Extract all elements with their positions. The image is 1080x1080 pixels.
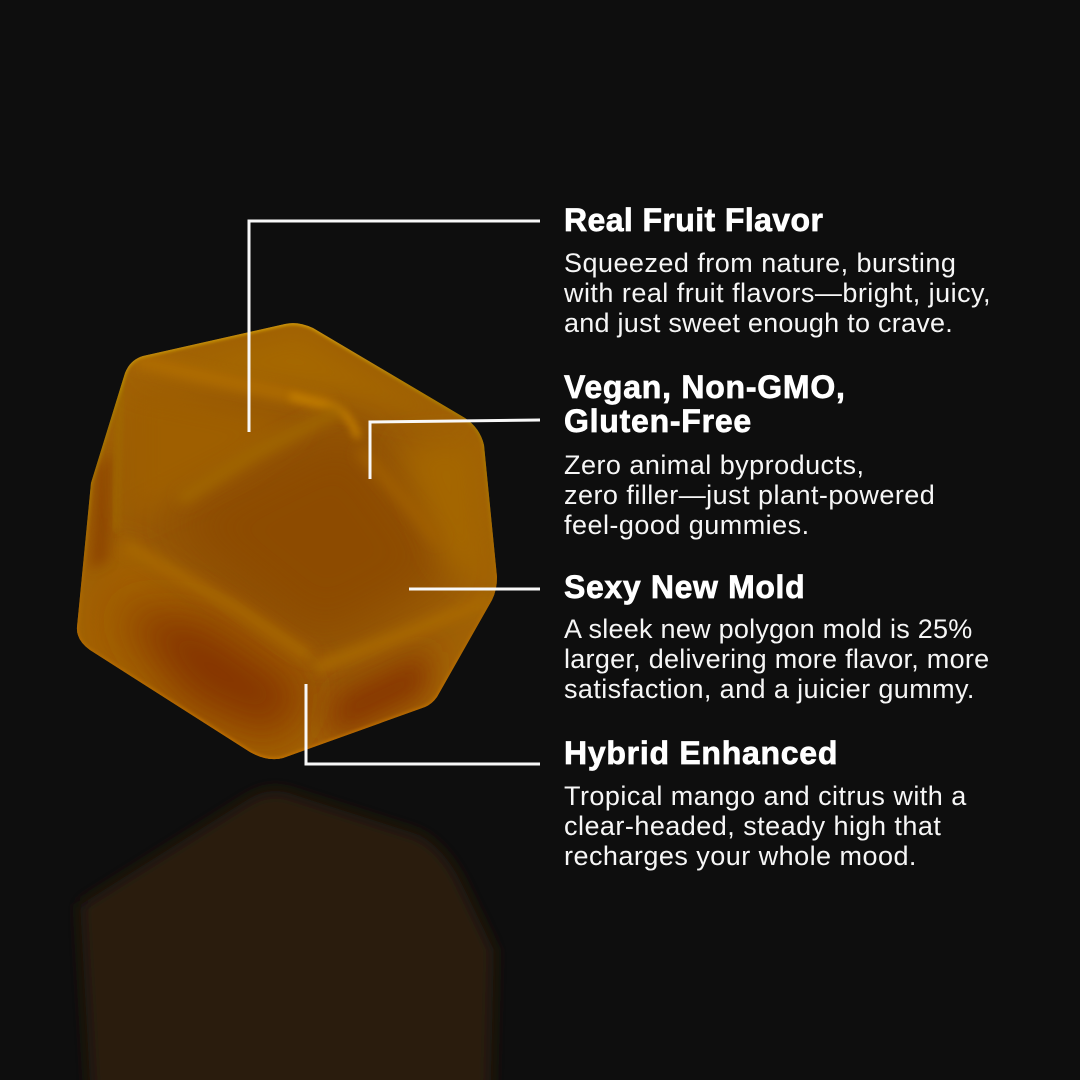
leader line: Vegan, Non-GMO, Gluten-Free	[370, 420, 540, 479]
description: Squeezed from nature, bursting	[564, 248, 956, 278]
description: Tropical mango and citrus with a	[564, 781, 967, 811]
description	[564, 248, 991, 338]
gummy body	[70, 323, 497, 770]
heading: Hybrid Enhanced	[564, 735, 838, 771]
description: Zero animal byproducts,	[564, 450, 864, 480]
description: A sleek new polygon mold is 25%	[564, 614, 972, 644]
heading	[564, 369, 846, 439]
description	[564, 450, 935, 540]
feature: Sexy New Mold	[564, 569, 989, 704]
description: clear-headed, steady high that	[564, 811, 941, 841]
bottom-left face	[77, 572, 304, 760]
description: feel-good gummies.	[564, 510, 810, 540]
facet ridges	[135, 360, 330, 404]
left dark sliver	[90, 450, 112, 570]
gummy illustration with reflection and leader lines	[76, 220, 540, 1080]
description: recharges your whole mood.	[564, 841, 917, 871]
bottom red tones	[120, 610, 310, 740]
heading: Real Fruit Flavor	[564, 202, 823, 238]
description	[564, 781, 967, 871]
description	[564, 614, 989, 704]
heading: Vegan, Non-GMO,	[564, 369, 846, 405]
rim glow	[77, 323, 497, 759]
leader line: Hybrid Enhanced	[306, 684, 540, 764]
description: and just sweet enough to crave.	[564, 308, 953, 338]
leader line: Real Fruit Flavor	[249, 221, 540, 432]
description: larger, delivering more flavor, more	[564, 644, 989, 674]
heading: Sexy New Mold	[564, 569, 805, 605]
reflection of gummy	[80, 791, 494, 1080]
description: satisfaction, and a juicier gummy.	[564, 674, 975, 704]
description: zero filler—just plant-powered	[564, 480, 935, 510]
feature: Vegan, Non-GMO, Gluten-Free	[564, 369, 935, 540]
description: with real fruit flavors—bright, juicy,	[564, 278, 991, 308]
leader line: Sexy New Mold	[409, 588, 540, 590]
central facet	[312, 463, 431, 610]
feature: Hybrid Enhanced	[564, 735, 967, 871]
upper facets	[219, 345, 382, 402]
heading: Gluten-Free	[564, 403, 752, 439]
feature: Real Fruit Flavor	[564, 202, 991, 338]
